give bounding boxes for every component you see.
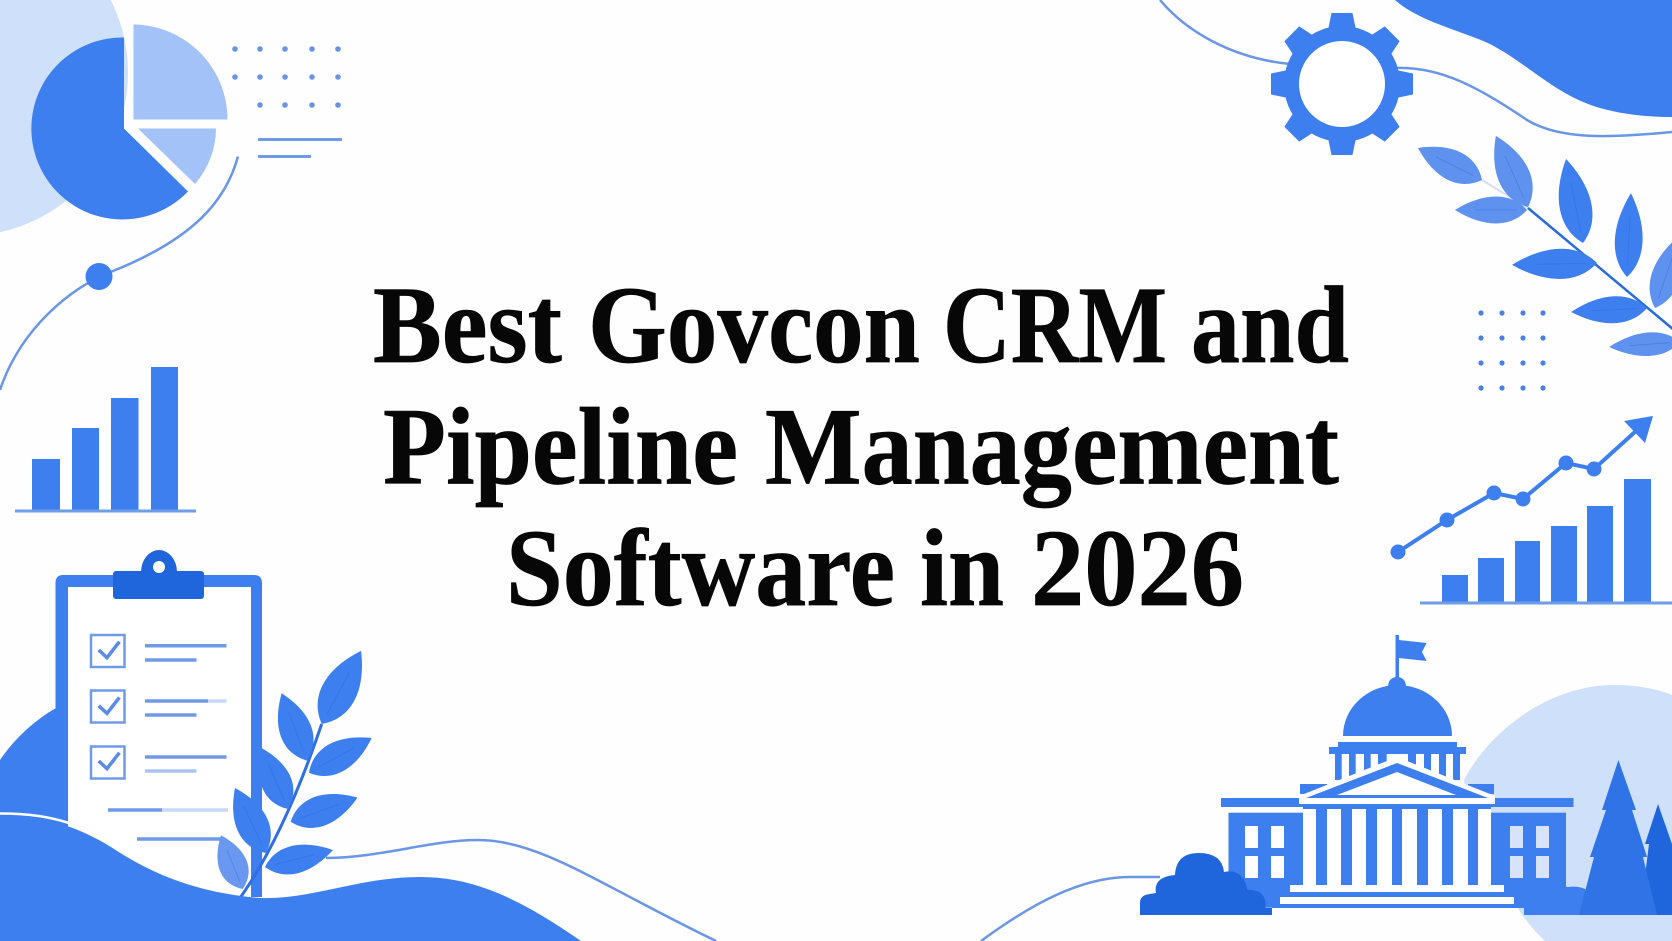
pediment (1299, 757, 1495, 804)
connector curve with node (0, 156, 238, 390)
top-right curves (1160, 0, 1672, 136)
bottom line from plant (326, 840, 716, 941)
bush left (1140, 853, 1272, 915)
checklist footer lines (108, 810, 228, 839)
wings (1228, 804, 1566, 908)
title: in (920, 507, 1004, 629)
windows right (1510, 826, 1549, 878)
curve to capitol (981, 877, 1160, 941)
columns (1303, 809, 1491, 885)
gear icon (1271, 13, 1413, 155)
bush right (1524, 887, 1592, 915)
checklist row 1 (91, 635, 226, 667)
title: Software (506, 507, 895, 629)
title: Management (765, 386, 1339, 508)
title: Best (373, 264, 562, 386)
pie chart (31, 24, 227, 219)
dot grid top-left (232, 46, 341, 108)
dome (1329, 677, 1466, 754)
flag (1396, 635, 1427, 679)
bottom-left hump (0, 708, 70, 830)
bottom-left wave (0, 814, 581, 941)
title: CRM (943, 264, 1167, 386)
bars (1420, 479, 1672, 603)
clipboard clip (113, 550, 204, 599)
checklist row 3 (91, 746, 226, 778)
top-left light circle (0, 0, 128, 236)
legend lines (258, 140, 342, 156)
steps (1272, 885, 1524, 908)
capitol building (1221, 635, 1574, 908)
windows left (1245, 826, 1284, 878)
trees (1579, 760, 1672, 915)
wing tops (1221, 784, 1574, 807)
title: and (1191, 264, 1349, 386)
clipboard (56, 550, 262, 897)
growth chart right (1390, 416, 1672, 603)
trend line with arrow (1390, 416, 1653, 560)
title (373, 264, 1349, 629)
title: Govcon (588, 264, 920, 386)
plant left (208, 643, 379, 897)
dot grid right (1478, 310, 1546, 391)
top-right blob (1395, 0, 1672, 117)
leaf branch right (1411, 129, 1672, 359)
drum columns (1335, 754, 1460, 780)
bottom-right light blob (1464, 685, 1672, 941)
title: Pipeline (383, 386, 738, 508)
checklist row 2 (91, 690, 226, 722)
title: 2026 (1031, 507, 1244, 629)
bar chart left (15, 367, 196, 511)
